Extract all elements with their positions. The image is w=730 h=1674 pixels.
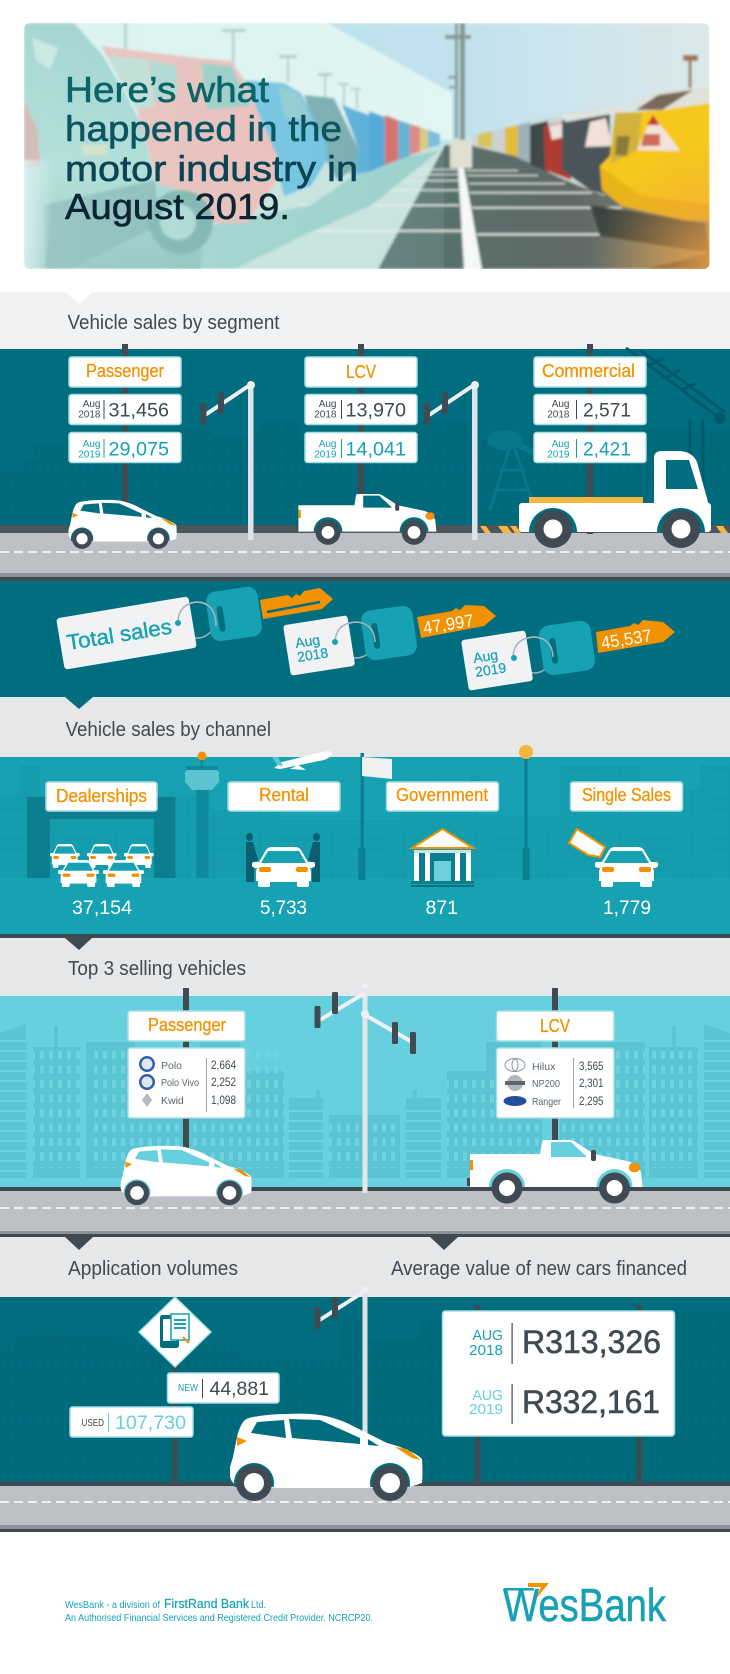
LCV table: 3,565 bbox=[579, 1061, 604, 1073]
sign: passenger: 29,075 bbox=[108, 438, 169, 460]
sign: single sales bbox=[570, 782, 682, 811]
footer legal text bbox=[65, 1596, 373, 1624]
passenger table: Polo Vivo bbox=[161, 1077, 199, 1089]
channel values bbox=[72, 897, 651, 919]
sign: commercial: 2,421 bbox=[583, 438, 631, 460]
sign: LCV: 2018 bbox=[314, 410, 337, 420]
channel values: 871 bbox=[426, 897, 458, 919]
sign: used applications bbox=[70, 1407, 193, 1437]
hero title: August 2019. bbox=[65, 186, 290, 227]
heading: application volumes: Application volumes bbox=[68, 1258, 238, 1280]
poles bbox=[172, 1305, 642, 1482]
LCV pickup bbox=[296, 494, 436, 545]
panel: vehicle sales by channel bbox=[0, 697, 730, 938]
icon: VW and Renault logos bbox=[139, 1056, 155, 1107]
passenger table: Kwid bbox=[161, 1095, 184, 1107]
key: Aug 2018: 47,997 bbox=[421, 610, 475, 638]
footer legal text: FirstRand Bank bbox=[164, 1596, 249, 1611]
WesBank logo: WesBank bbox=[503, 1579, 667, 1631]
passenger car bbox=[121, 1146, 252, 1205]
footer legal text: WesBank - a division of bbox=[65, 1599, 160, 1611]
right row of cars bbox=[473, 106, 605, 196]
sign: average values: AUG bbox=[472, 1388, 503, 1404]
sign: average values bbox=[442, 1311, 674, 1436]
footer legal text: An Authorised Financial Services and Registered Credit Provider. NCRCP20. bbox=[65, 1612, 373, 1624]
sign: LCV: 13,970 bbox=[346, 400, 406, 422]
traffic light bbox=[314, 1286, 368, 1438]
sign: passenger: 2018 bbox=[78, 410, 101, 420]
sign: passenger: Passenger bbox=[86, 361, 164, 381]
sign: rental bbox=[228, 782, 340, 811]
key: Aug 2019 bbox=[461, 620, 675, 691]
LCV table: Ranger bbox=[532, 1096, 561, 1108]
channel values: 37,154 bbox=[72, 897, 132, 919]
sign: used applications: 107,730 bbox=[115, 1412, 186, 1434]
heading: vehicle sales by channel: Vehicle sales by channel bbox=[66, 719, 271, 741]
sign: commercial: Aug bbox=[552, 399, 570, 410]
sign: LCV: LCV bbox=[346, 362, 376, 382]
key: Aug 2018 bbox=[283, 605, 496, 676]
sign: passenger bbox=[69, 357, 181, 462]
sign: LCV: 14,041 bbox=[346, 438, 406, 460]
panel: vehicle sales by segment bbox=[0, 292, 730, 581]
sign: used applications: USED bbox=[82, 1417, 104, 1429]
city skyline bbox=[0, 1024, 730, 1178]
road bbox=[0, 525, 730, 581]
sign poles bbox=[183, 988, 558, 1170]
icon: dealership cars bbox=[50, 844, 154, 887]
key: Aug 2019: 45,537 bbox=[599, 625, 653, 653]
passenger sign: Passenger bbox=[148, 1015, 226, 1035]
dealership gate bbox=[27, 797, 176, 878]
sign: dealerships bbox=[46, 782, 157, 811]
sign: rental: Rental bbox=[259, 785, 309, 805]
sign: passenger: Aug bbox=[83, 439, 100, 450]
sign: LCV: Aug bbox=[319, 439, 336, 450]
key: Aug 2018: Aug bbox=[294, 631, 321, 651]
road bbox=[0, 1482, 730, 1532]
key: Aug 2019: 2019 bbox=[474, 659, 507, 680]
plane bbox=[272, 751, 332, 770]
LCV sign: LCV bbox=[540, 1016, 570, 1036]
LCV sign bbox=[496, 1011, 614, 1041]
passenger table: Polo bbox=[161, 1060, 182, 1072]
road bbox=[0, 1187, 730, 1237]
LCV table: 2,301 bbox=[579, 1078, 604, 1090]
illustration: oil pump and crane bbox=[487, 348, 726, 510]
sign: average values: 2018 bbox=[469, 1343, 503, 1359]
shadows under left cars bbox=[199, 150, 439, 269]
panel: top 3 selling vehicles bbox=[0, 938, 730, 1237]
sign: dealerships: Dealerships bbox=[56, 786, 147, 806]
sign: passenger: Aug bbox=[83, 399, 100, 410]
passenger sign bbox=[128, 1011, 245, 1041]
LCV table bbox=[496, 1048, 614, 1118]
sign: LCV: 2019 bbox=[314, 450, 337, 460]
panel: application volumes and average value bbox=[0, 1237, 730, 1532]
channel values: 1,779 bbox=[603, 897, 651, 919]
sign: commercial bbox=[534, 357, 646, 462]
channel values: 5,733 bbox=[260, 897, 307, 919]
sign: government bbox=[386, 782, 498, 811]
traffic light 2 bbox=[424, 381, 479, 540]
key: total sales bbox=[56, 586, 333, 670]
sign: average values: AUG bbox=[472, 1328, 503, 1344]
key: Aug 2018: 2018 bbox=[296, 644, 329, 665]
sign: LCV bbox=[305, 357, 417, 462]
sign: commercial: 2,571 bbox=[583, 400, 631, 422]
hero title bbox=[65, 69, 358, 227]
icons: Toyota, Nissan, Ford logos bbox=[504, 1058, 526, 1106]
LCV pickup bbox=[467, 1140, 642, 1204]
hero photo: car park bbox=[24, 23, 710, 269]
icon: rental handover bbox=[246, 833, 320, 887]
sign: commercial: 2019 bbox=[547, 450, 570, 460]
sign: commercial: Commercial bbox=[542, 361, 635, 381]
hero title: Here’s what bbox=[65, 69, 269, 110]
heading: vehicle sales by segment: Vehicle sales by segment bbox=[68, 312, 280, 334]
heading: top 3 selling vehicles: Top 3 selling vehicles bbox=[68, 958, 246, 980]
commercial truck bbox=[519, 451, 711, 548]
icon: application diamond bbox=[139, 1297, 211, 1367]
panel: total sales keys bbox=[0, 581, 730, 697]
sign: average values: R313,326 bbox=[522, 1324, 661, 1360]
sign: LCV: Aug bbox=[319, 399, 336, 410]
traffic light 1 bbox=[200, 381, 255, 540]
traffic light bbox=[314, 983, 416, 1193]
LCV table: NP200 bbox=[532, 1078, 560, 1090]
sign: new applications bbox=[168, 1373, 279, 1403]
flag bbox=[358, 753, 392, 880]
sign: passenger: 2019 bbox=[78, 450, 101, 460]
key: Aug 2019: Aug bbox=[472, 646, 499, 666]
hero title: motor industry in bbox=[65, 148, 358, 189]
passenger table: 2,252 bbox=[211, 1077, 236, 1089]
LCV table: 2,295 bbox=[579, 1096, 604, 1108]
sign: new applications: NEW bbox=[178, 1382, 198, 1394]
sign: single sales: Single Sales bbox=[582, 785, 671, 805]
icon: government building bbox=[411, 829, 474, 887]
sign poles bbox=[122, 344, 593, 534]
hero title: happened in the bbox=[65, 108, 342, 149]
passenger table bbox=[128, 1048, 245, 1118]
sign: passenger: 31,456 bbox=[108, 400, 169, 422]
sign: commercial: 2018 bbox=[547, 410, 570, 420]
sign: new applications: 44,881 bbox=[210, 1378, 269, 1400]
LCV table: Hilux bbox=[532, 1061, 556, 1073]
passenger table: 1,098 bbox=[211, 1095, 236, 1107]
icon: single sale car with tag bbox=[569, 829, 658, 887]
key: total sales: Total sales bbox=[65, 615, 173, 655]
sign: commercial: Aug bbox=[552, 439, 570, 450]
car bbox=[230, 1414, 422, 1501]
lamp bbox=[519, 745, 533, 880]
passenger car bbox=[69, 500, 177, 549]
control tower bbox=[185, 752, 219, 878]
sign: average values: 2019 bbox=[469, 1402, 503, 1418]
footer legal text: Ltd. bbox=[251, 1599, 266, 1611]
passenger table: 2,664 bbox=[211, 1060, 237, 1072]
sign: government: Government bbox=[396, 785, 488, 805]
heading: average value: Average value of new cars financed bbox=[391, 1258, 687, 1280]
sign: average values: R332,161 bbox=[522, 1384, 660, 1420]
